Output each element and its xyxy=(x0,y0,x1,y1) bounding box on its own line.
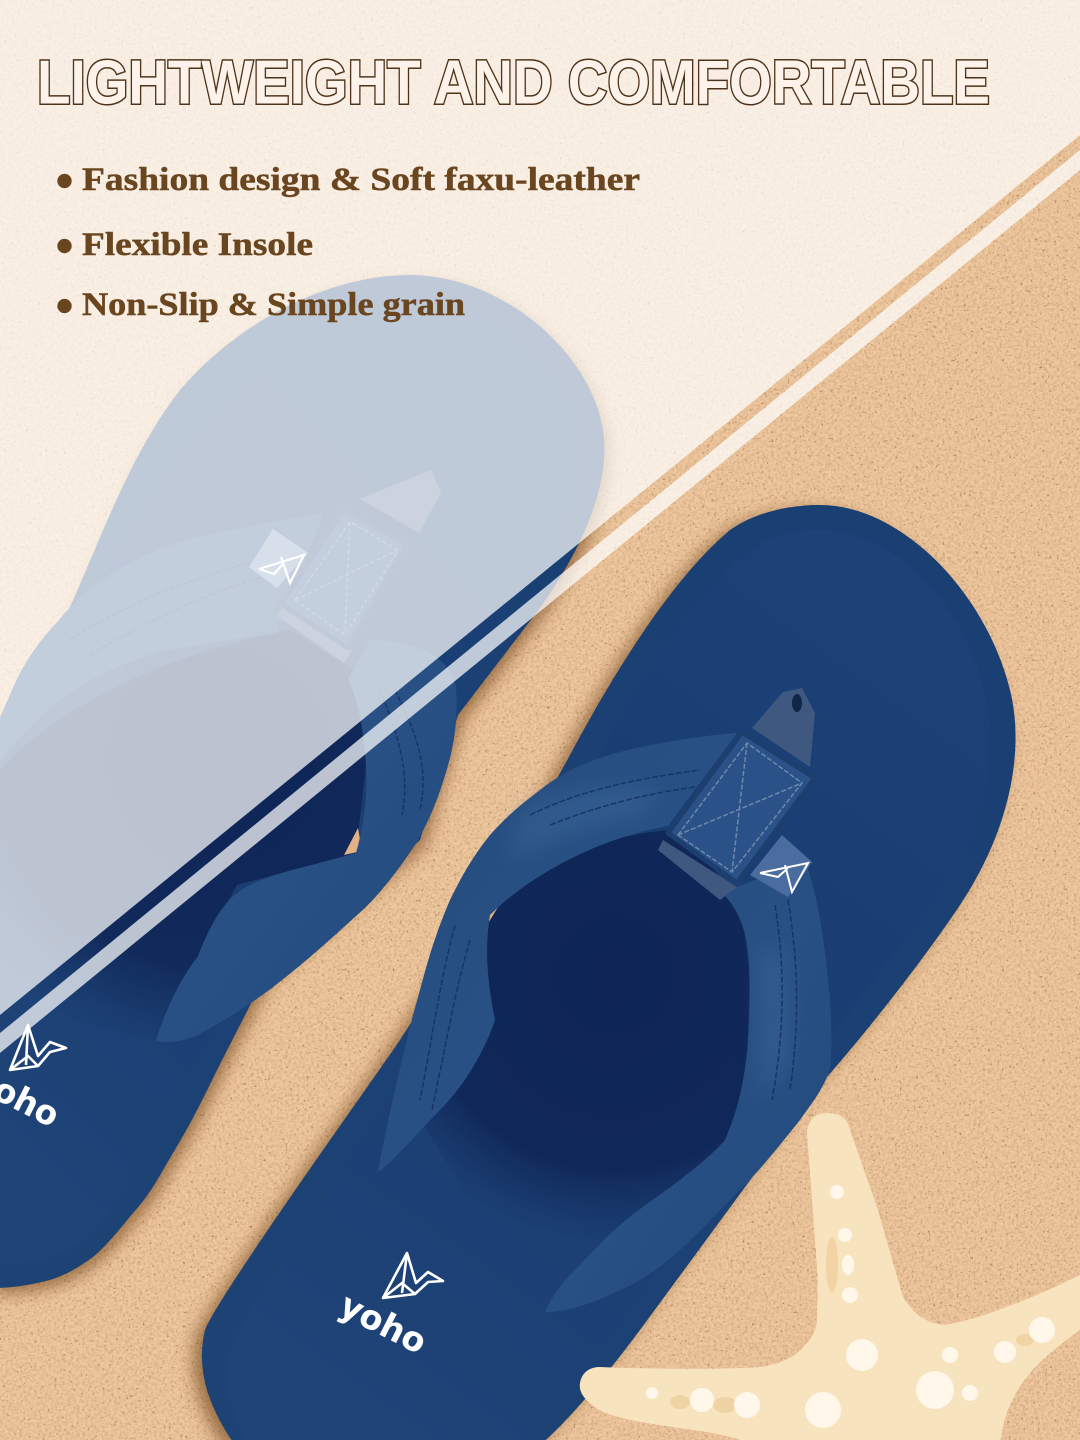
left sandal tag bird xyxy=(259,555,304,583)
right sandal right strap xyxy=(545,860,832,1312)
left sandal sand sliver xyxy=(344,828,362,855)
right sandal xyxy=(202,505,1016,1440)
left sandal strap stitching xyxy=(70,553,423,815)
bullet list xyxy=(58,162,640,323)
right sandal strap highlights xyxy=(510,786,790,1100)
starfish body xyxy=(580,1113,1080,1440)
left sandal tag xyxy=(249,529,308,588)
left sandal xyxy=(0,275,604,1288)
right sandal bird logo xyxy=(383,1253,443,1298)
left sandal arch interior xyxy=(0,630,370,1040)
left sandal toe webbing xyxy=(360,470,441,533)
left sandal sole xyxy=(0,275,604,1288)
right sandal toe webbing xyxy=(752,688,815,767)
left sandal lower webbing xyxy=(277,605,352,663)
right sandal tag bird xyxy=(760,863,808,892)
translucent overlay above diagonal xyxy=(0,0,1080,1015)
bullet 2: Flexible Insole xyxy=(82,227,313,263)
right sandal lower webbing xyxy=(658,840,737,900)
left sandal footbed xyxy=(0,298,583,1266)
right sandal patch xyxy=(668,732,815,883)
sandal shadows on sand xyxy=(0,281,1007,1440)
starfish pearls xyxy=(646,1185,1055,1428)
starfish orange flecks xyxy=(670,1237,1034,1413)
bullet 3: Non-Slip & Simple grain xyxy=(82,287,465,323)
diagonal pale stripe xyxy=(0,150,1080,1053)
left sandal arch strap xyxy=(0,513,324,775)
left sandal bird logo xyxy=(10,1025,66,1070)
left sandal patch xyxy=(281,509,407,648)
right sandal sole xyxy=(202,505,1016,1440)
right sandal strap stitching xyxy=(420,770,797,1110)
right sandal patch stitches xyxy=(678,743,802,872)
right sandal arch strap xyxy=(378,733,737,1172)
right sandal brand text: yoho xyxy=(333,1285,433,1363)
right sandal sand sliver xyxy=(487,899,503,925)
left sandal right strap xyxy=(156,640,457,1042)
right sandal footbed xyxy=(227,530,991,1440)
right sandal tag xyxy=(750,835,812,897)
bullet 1: Fashion design & Soft faxu-leather xyxy=(82,162,640,198)
right sandal arch interior xyxy=(420,830,770,1290)
right sandal toe post hole xyxy=(792,694,802,712)
left sandal patch stitches xyxy=(295,522,398,635)
starfish xyxy=(580,1113,1080,1440)
